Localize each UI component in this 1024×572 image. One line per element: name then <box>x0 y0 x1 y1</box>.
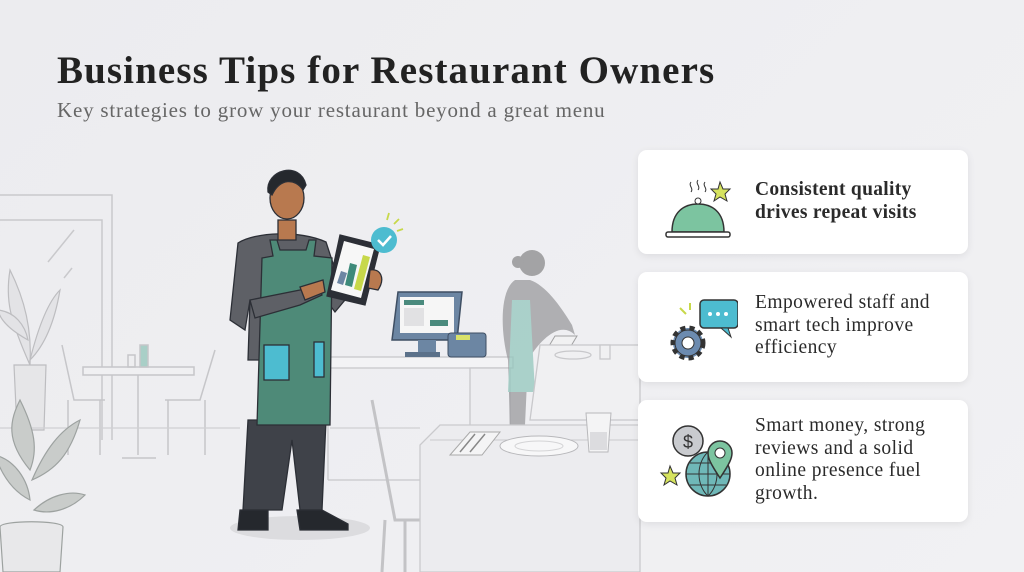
text: Empowered staff and <box>755 292 930 313</box>
card: consistent quality <box>638 150 968 254</box>
check badge <box>371 213 403 253</box>
right back table <box>530 345 640 420</box>
text: reviews and a solid <box>755 438 914 458</box>
waitress <box>503 250 577 425</box>
foreground chair <box>372 400 425 572</box>
text: drives repeat visits <box>755 202 917 222</box>
text: efficiency <box>755 337 837 358</box>
text: Smart money, strong <box>755 415 925 436</box>
counter <box>325 357 513 480</box>
left dining table with chairs <box>62 345 215 458</box>
bottom-left plant <box>0 400 85 572</box>
man presenting tablet <box>230 170 382 530</box>
window frame <box>0 195 112 440</box>
text: smart tech improve <box>755 314 914 336</box>
text <box>755 292 930 358</box>
text: online presence fuel <box>755 460 921 481</box>
icon: globe, coin, pin, star: $ <box>683 432 693 452</box>
foreground table with plate and glass <box>420 413 640 572</box>
icon: gear and chat <box>670 299 738 360</box>
text: growth. <box>755 482 818 504</box>
text <box>755 415 925 504</box>
icon: cloche with star <box>665 180 732 238</box>
floor line <box>0 427 420 429</box>
man shadow <box>230 516 370 540</box>
POS terminal <box>392 292 486 357</box>
card: money reviews online <box>638 400 968 522</box>
card: staff and tech <box>638 272 968 382</box>
text: Consistent quality <box>755 179 912 200</box>
title: Business Tips for Restaurant Owners <box>57 49 715 92</box>
left plant in pot <box>0 270 60 430</box>
text <box>755 179 917 222</box>
subtitle: Key strategies to grow your restaurant beyond a great menu <box>57 98 605 122</box>
icon: globe, coin, pin, star <box>660 425 733 497</box>
